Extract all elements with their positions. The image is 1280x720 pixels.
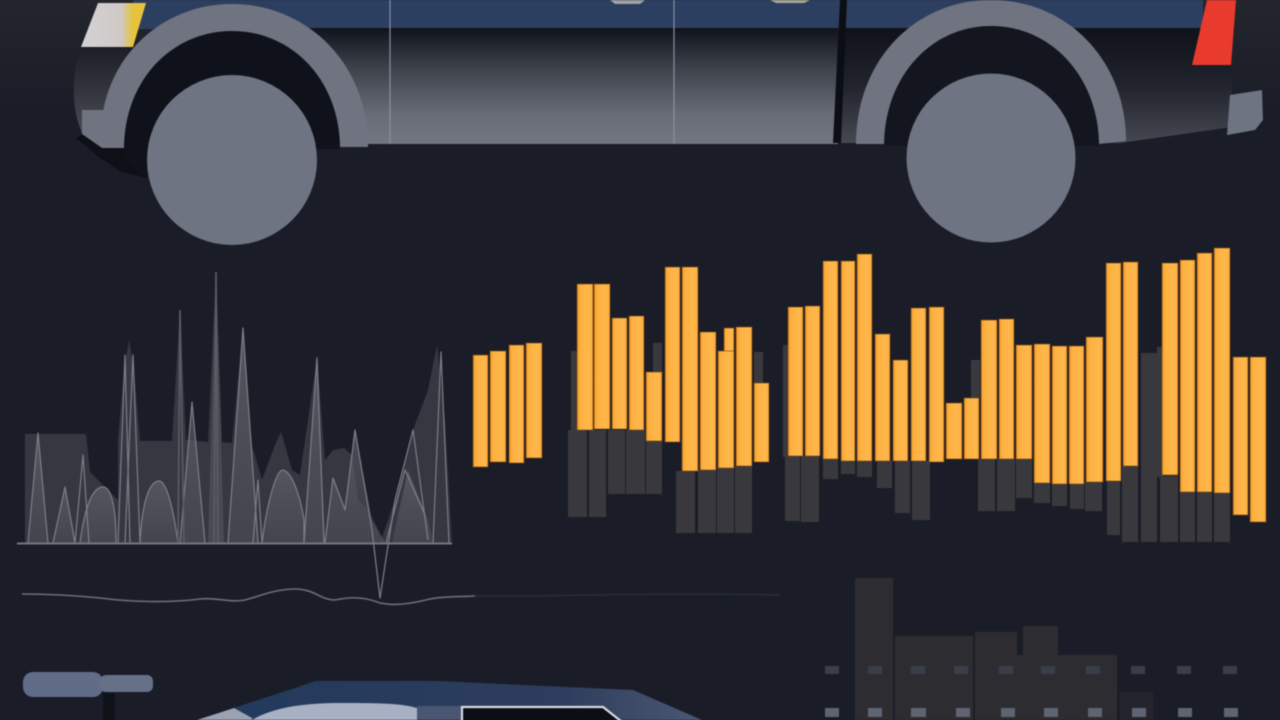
- left side window: [197, 708, 252, 720]
- door seam lines: [390, 0, 674, 144]
- small sign panel: [100, 675, 153, 692]
- lower car: [197, 681, 702, 720]
- car roof: [234, 681, 702, 720]
- upper window row: [825, 666, 1237, 674]
- front wheel well left shadow: [124, 148, 148, 178]
- chart baseline: [17, 542, 452, 544]
- rear wheel well: [884, 26, 1099, 146]
- chart outlines: [28, 328, 449, 598]
- waveform bright segment: [22, 589, 475, 604]
- front wheel arch: [101, 4, 368, 147]
- windscreen: [462, 707, 622, 720]
- front fender body: [74, 47, 135, 133]
- dark shadow bars: [568, 343, 1230, 542]
- waveform fading segment: [475, 594, 780, 596]
- faint tall spikes: [178, 272, 218, 543]
- tail light: [1192, 0, 1236, 65]
- signpost: [23, 672, 153, 720]
- back area layer: [25, 270, 452, 543]
- door gap: [833, 0, 847, 143]
- rear bumper: [1227, 90, 1263, 135]
- lower door panels: [300, 28, 838, 144]
- truck side view: [74, 0, 1263, 245]
- front bumper: [82, 110, 124, 148]
- window band: [133, 0, 1203, 29]
- rear quarter panel: [840, 28, 1232, 143]
- skyline bars: [855, 578, 1153, 720]
- rear wheel: [906, 74, 1076, 242]
- front side window: [252, 703, 417, 720]
- large sign panel: [23, 672, 103, 697]
- under-bumper shadow: [76, 134, 147, 178]
- pillar: [417, 706, 461, 720]
- area and line chart: [17, 270, 452, 598]
- door handles: [610, 0, 810, 4]
- orange bar chart: [473, 248, 1266, 522]
- rear wheel arch: [856, 0, 1126, 144]
- post: [103, 693, 115, 720]
- waveform line: [22, 589, 780, 604]
- skyline windows: [825, 666, 1238, 717]
- headlight: [81, 3, 146, 47]
- front wheel well: [124, 31, 340, 149]
- front wheel: [147, 75, 317, 245]
- lower window row: [825, 708, 1238, 717]
- domes and peaks layer: [28, 328, 433, 543]
